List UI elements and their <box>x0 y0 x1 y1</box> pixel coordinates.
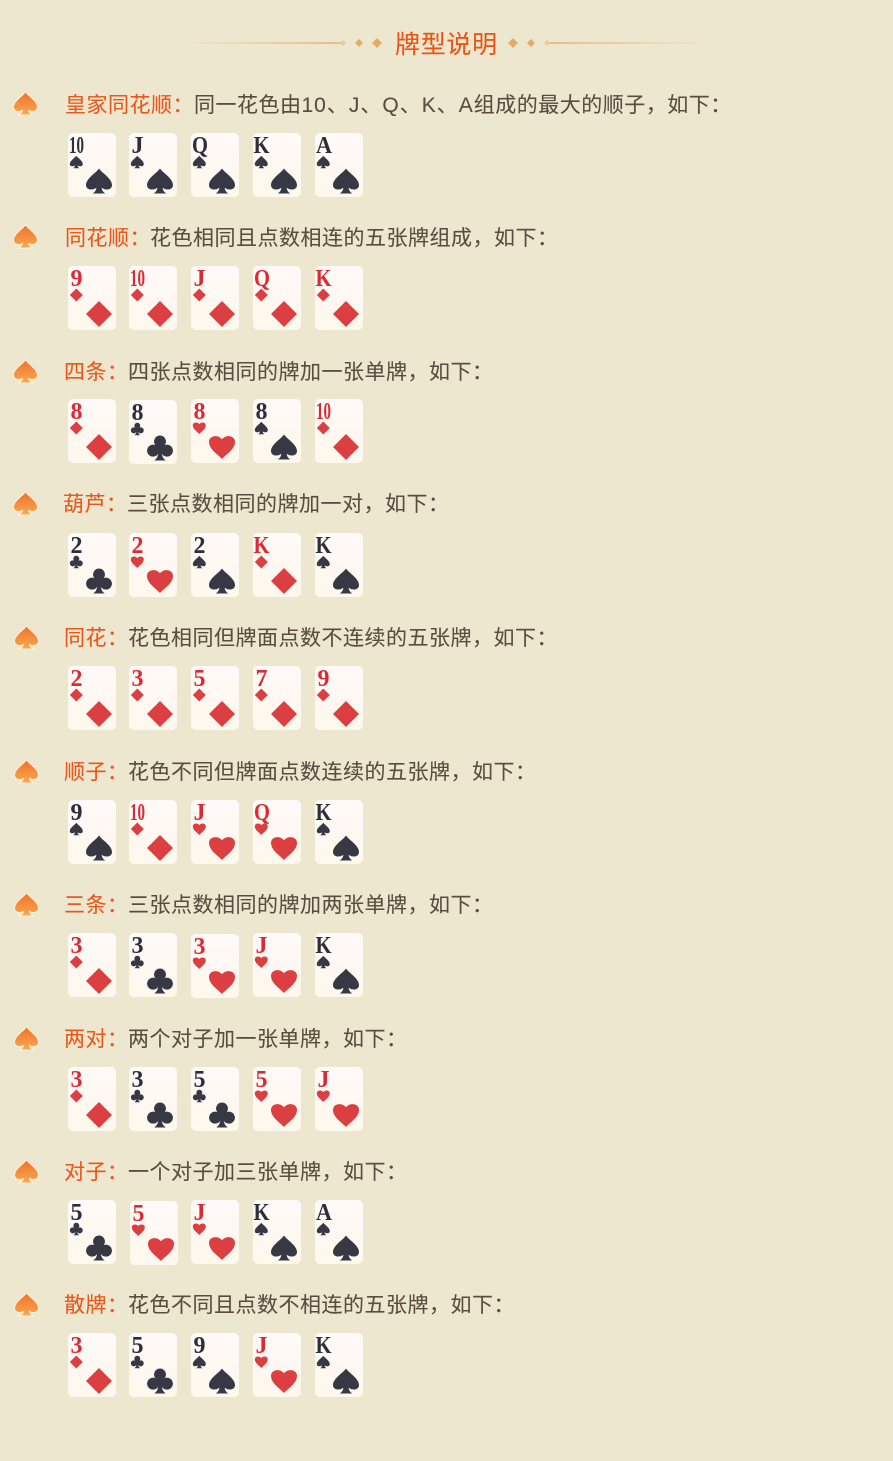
section: 散牌 <box>15 1293 515 1397</box>
cards: 葫芦: 2 <box>132 533 144 559</box>
cards: 两对 <box>68 1067 363 1131</box>
cards: 顺子 <box>68 800 363 864</box>
cards: 顺子: K <box>316 800 332 826</box>
heading: 三条: 三条： <box>64 894 128 917</box>
cards: 葫芦: K <box>254 533 270 559</box>
cards: 同花顺: K <box>316 266 332 292</box>
section: 皇家同花顺 <box>14 92 732 197</box>
cards: 对子: 5 <box>132 1201 144 1227</box>
icon: spade bullet <box>15 893 38 916</box>
description: 两对: 两个对子加一张单牌，如下： <box>128 1028 408 1051</box>
cards: 顺子: Q <box>254 800 270 826</box>
cards: 对子: A <box>316 1200 333 1226</box>
cards: 四条 <box>68 399 363 464</box>
cards: 同花: 9 <box>318 666 330 692</box>
icon: spade bullet <box>14 92 37 115</box>
cards: 散牌 <box>68 1333 363 1397</box>
cards: 散牌: 9 <box>194 1333 206 1359</box>
cards: 对子: 5 <box>70 1200 82 1226</box>
heading: 葫芦: 葫芦： <box>63 493 128 516</box>
cards: 同花顺: 10 <box>130 266 145 292</box>
cards: 三条 <box>68 933 363 998</box>
cards: 顺子: 10 <box>130 800 145 826</box>
icon: spade bullet <box>14 360 37 383</box>
cards: 散牌: 5 <box>132 1333 144 1359</box>
heading: 对子: 对子： <box>64 1161 128 1184</box>
cards: 葫芦: K <box>316 533 332 559</box>
cards: 三条: K <box>316 933 332 959</box>
section: 顺子 <box>15 760 536 864</box>
heading: 同花: 同花： <box>64 627 128 650</box>
cards: 同花: 5 <box>194 666 206 692</box>
title banner <box>180 31 710 59</box>
icon: spade bullet <box>15 1160 38 1183</box>
icon: spade bullet <box>14 492 37 515</box>
section: 同花 <box>15 626 558 730</box>
cards: 三条: 3 <box>132 933 144 959</box>
cards: 两对: 3 <box>132 1067 144 1093</box>
section: 两对 <box>15 1027 408 1131</box>
description: 皇家同花顺: 同一花色由10、J、Q、K、A组成的最大的顺子，如下： <box>194 94 732 117</box>
description: 同花顺: 花色相同且点数相连的五张牌组成，如下： <box>150 227 558 250</box>
cards: 四条: 8 <box>132 400 144 426</box>
section: 同花顺 <box>14 225 558 330</box>
description: 四条: 四张点数相同的牌加一张单牌，如下： <box>128 361 494 384</box>
heading: 散牌: 散牌： <box>64 1294 128 1317</box>
cards: 同花顺 <box>68 266 363 330</box>
title text: 牌型说明 <box>395 31 498 59</box>
description: 葫芦: 三张点数相同的牌加一对，如下： <box>127 493 450 516</box>
cards: 皇家同花顺 <box>68 133 363 197</box>
heading: 同花顺: 同花顺： <box>65 227 151 250</box>
section: 葫芦 <box>14 492 450 597</box>
cards: 两对: 3 <box>70 1067 82 1093</box>
cards: 对子: J <box>194 1200 206 1226</box>
cards: 三条: 3 <box>194 934 206 960</box>
section: 四条 <box>14 360 494 464</box>
cards: 对子: K <box>254 1200 270 1226</box>
cards: 同花 <box>68 666 363 730</box>
cards: 四条: 8 <box>70 399 82 425</box>
cards: 皇家同花顺: 10 <box>69 133 84 159</box>
cards: 皇家同花顺: Q <box>192 133 208 159</box>
section: 对子 <box>15 1160 408 1265</box>
cards: 葫芦: 2 <box>70 533 82 559</box>
cards: 葫芦 <box>68 533 363 597</box>
cards: 两对: J <box>318 1067 330 1093</box>
cards: 皇家同花顺: J <box>132 133 144 159</box>
cards: 两对: 5 <box>194 1067 206 1093</box>
cards: 四条: 10 <box>316 399 331 425</box>
cards: 同花顺: 9 <box>70 266 82 292</box>
cards: 同花顺: Q <box>254 266 270 292</box>
description: 同花: 花色相同但牌面点数不连续的五张牌，如下： <box>128 627 558 650</box>
cards: 皇家同花顺: K <box>254 133 270 159</box>
section: 三条 <box>15 893 494 998</box>
icon: spade bullet <box>15 1027 38 1050</box>
cards: 顺子: 9 <box>70 800 82 826</box>
heading: 四条: 四条： <box>64 361 128 384</box>
cards: 三条: J <box>256 933 268 959</box>
cards: 同花: 7 <box>256 666 268 692</box>
cards: 同花: 3 <box>132 666 144 692</box>
icon: spade bullet <box>15 760 38 783</box>
cards: 散牌: J <box>256 1333 268 1359</box>
cards: 同花顺: J <box>194 266 206 292</box>
cards: 四条: 8 <box>256 399 268 425</box>
heading: 两对: 两对： <box>64 1028 128 1051</box>
cards: 葫芦: 2 <box>194 533 206 559</box>
description: 散牌: 花色不同且点数不相连的五张牌，如下： <box>128 1294 515 1317</box>
cards: 同花: 2 <box>70 666 82 692</box>
heading: 顺子: 顺子： <box>64 761 128 784</box>
cards: 两对: 5 <box>256 1067 268 1093</box>
cards: 对子 <box>68 1200 363 1265</box>
cards: 散牌: K <box>316 1333 332 1359</box>
icon: spade bullet <box>15 626 38 649</box>
cards: 皇家同花顺: A <box>316 133 333 159</box>
cards: 顺子: J <box>194 800 206 826</box>
description: 三条: 三张点数相同的牌加两张单牌，如下： <box>128 894 494 917</box>
description: 顺子: 花色不同但牌面点数连续的五张牌，如下： <box>128 761 536 784</box>
icon: spade bullet <box>14 225 37 248</box>
description: 对子: 一个对子加三张单牌，如下： <box>128 1161 408 1184</box>
heading: 皇家同花顺: 皇家同花顺： <box>65 94 194 117</box>
cards: 四条: 8 <box>194 399 206 425</box>
icon: spade bullet <box>15 1293 38 1316</box>
cards: 散牌: 3 <box>70 1333 82 1359</box>
cards: 三条: 3 <box>70 933 82 959</box>
